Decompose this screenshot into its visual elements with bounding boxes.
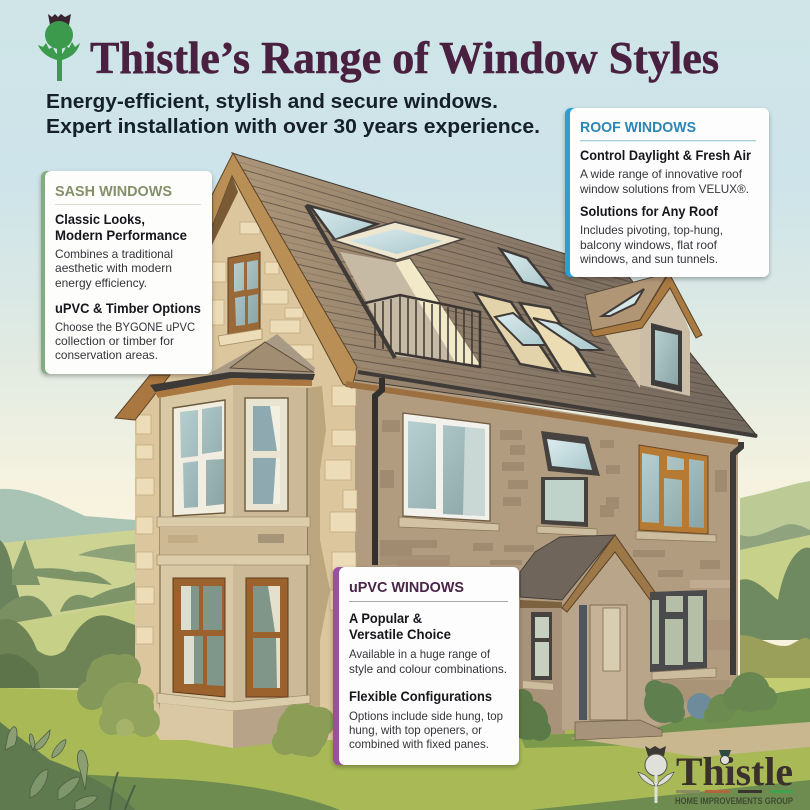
card heading: upvc: uPVC WINDOWS (349, 579, 464, 596)
card sub-block: flexible: combined with fixed panes. (349, 738, 489, 751)
card sub-block: flexible: Flexible Configurations (349, 688, 492, 704)
lawn shadow right (640, 688, 810, 738)
card sub-block: any roof: Includes pivoting, top-hung, (580, 224, 723, 237)
front window: timber casement (636, 445, 716, 542)
card: roof windows (565, 108, 769, 277)
shrub: left small (99, 682, 160, 737)
garden path (570, 722, 810, 757)
shrub: left large (77, 654, 141, 716)
card: upvc windows (333, 567, 519, 765)
shrub: right low (704, 694, 736, 723)
house: gable bargeboard (212, 153, 357, 388)
roof window: pivot pair (475, 293, 602, 376)
card sub-block: upvc and timber: conservation areas. (55, 349, 158, 362)
house: shadow beside bay (307, 386, 330, 730)
card sub-block: popular (349, 610, 507, 676)
card sub-block: upvc and timber: Choose the BYGONE uPVC (55, 321, 195, 334)
card: sash windows (41, 171, 212, 374)
house: main front wall (355, 378, 738, 730)
house: stonework on main wall (380, 420, 732, 702)
lawn shadow bottom (0, 770, 810, 810)
card sub-block: any roof (579, 203, 723, 266)
bay window: upper right sash (245, 398, 288, 511)
gable window (218, 252, 262, 346)
downpipe left (375, 378, 382, 565)
house: gutter and fascia (346, 372, 757, 442)
house: main roof (232, 153, 757, 436)
shrub: centre (272, 704, 335, 757)
card sub-block: popular: A Popular & (349, 610, 422, 626)
card sub-block: any roof: windows, and sun tunnels. (579, 253, 718, 266)
card sub-block: daylight (579, 147, 751, 196)
card sub-block: flexible: Options include side hung, top (349, 710, 503, 723)
bay window: lower left timber sash (173, 578, 225, 697)
card sub-block: flexible: hung, with top openers, or (349, 724, 482, 737)
card sub-block: classic looks: aesthetic with modern (55, 262, 172, 275)
card sub-block: popular: Available in a huge range of (349, 648, 491, 661)
logo icon (638, 746, 674, 803)
porch (520, 535, 664, 740)
title: Thistle’s Range of Window Styles (90, 33, 719, 83)
front window: anthracite ground floor (650, 590, 716, 680)
subtitle (46, 91, 540, 138)
shrub: porch right (644, 680, 685, 723)
card heading: sash: SASH WINDOWS (55, 183, 172, 200)
card sub-block: classic looks: energy efficiency. (55, 277, 147, 290)
card sub-block: upvc and timber (55, 300, 201, 362)
card sub-block: daylight: A wide range of innovative roof (580, 168, 743, 181)
card sub-block: popular: Versatile Choice (349, 626, 451, 642)
card sub-block: classic looks: Modern Performance (55, 227, 187, 243)
subtitle: Expert installation with over 30 years experience. (46, 116, 540, 138)
roof window: small upper (500, 249, 552, 289)
card sub-block: any roof: balcony windows, flat roof (580, 239, 718, 252)
landscape: right hills and fields (740, 481, 810, 692)
lawn (0, 688, 810, 810)
front window: anthracite top opener (537, 431, 600, 536)
front window: white uPVC (399, 413, 499, 531)
dormer (585, 273, 702, 396)
shrub: porch left (508, 689, 551, 741)
card sub-block: upvc and timber: uPVC & Timber Options (55, 300, 201, 316)
bay window structure (157, 385, 310, 748)
card sub-block: popular: style and colour combinations. (349, 663, 507, 676)
card sub-block: classic looks: Classic Looks, (55, 211, 145, 227)
logo wordmark: Thistle (676, 749, 793, 794)
shrub: blue (687, 693, 713, 719)
house: quoins on gable wall (136, 222, 357, 644)
roof window: balcony (306, 205, 480, 367)
bay window roof (150, 334, 315, 398)
house: left gable wall (135, 170, 360, 740)
landscape: left hills and fields (0, 489, 135, 700)
foreground plants bottom left (0, 722, 135, 810)
card sub-block: flexible (349, 688, 503, 751)
card sub-block: daylight: Control Daylight & Fresh Air (580, 147, 751, 163)
bay window: upper left sash (173, 400, 225, 516)
card sub-block: daylight: window solutions from VELUX®. (579, 183, 749, 196)
card sub-block: any roof: Solutions for Any Roof (580, 203, 718, 219)
icon: green thistle (38, 14, 80, 81)
lawn shadow under porch (520, 732, 660, 748)
card sub-block: upvc and timber: collection or timber for (55, 335, 174, 348)
card heading: roof: ROOF WINDOWS (580, 119, 696, 136)
card sub-block: classic looks (55, 211, 187, 290)
shrub: right large (723, 672, 777, 712)
bay window: lower right timber sash (246, 578, 288, 697)
house: left eave timber (115, 375, 170, 420)
card sub-block: classic looks: Combines a traditional (55, 248, 173, 261)
house: gable soffit shadow (212, 176, 238, 245)
logo: thistle home improvements group (638, 746, 794, 807)
downpipe right (733, 442, 741, 675)
subtitle: Energy-efficient, stylish and secure windows. (46, 91, 498, 113)
